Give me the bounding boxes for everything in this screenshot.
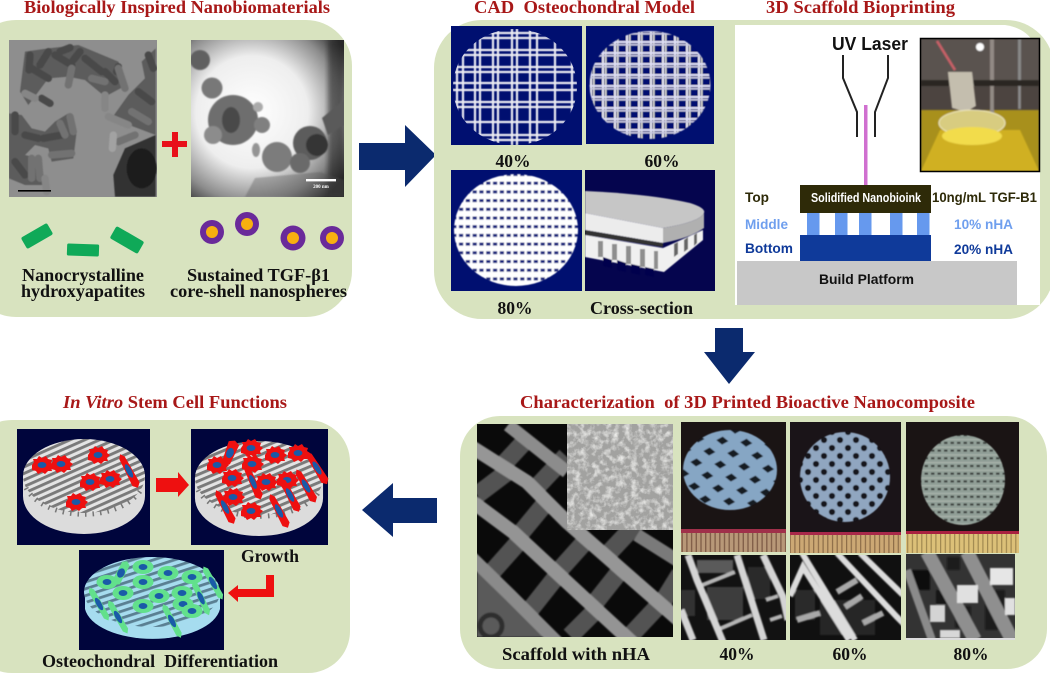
arrow: right bbox=[359, 125, 436, 187]
photo: 3D printed 60 percent scaffold bbox=[790, 422, 901, 553]
arrow: left bbox=[362, 483, 437, 537]
layer labels, left: Middle bbox=[745, 216, 788, 232]
labels: CAD model porosities: Cross-section bbox=[590, 298, 693, 318]
top layer: solidified nanobioink: Solidified Nanobioink bbox=[811, 190, 922, 205]
build platform: Build Platform bbox=[819, 271, 914, 287]
bottom layer bbox=[800, 235, 931, 261]
title: in vitro stem cell functions: In Vitro Stem Cell Functions bbox=[62, 392, 287, 412]
label: scaffold with nHA: Scaffold with nHA bbox=[502, 644, 650, 664]
layer labels, left: Bottom bbox=[745, 240, 793, 256]
top layer: solidified nanobioink bbox=[800, 185, 931, 213]
layer labels, right: 10% nHA bbox=[954, 216, 1013, 232]
layer labels, right: 20% nHA bbox=[954, 241, 1013, 257]
photo: printer bbox=[921, 39, 1039, 172]
labels: printed scaffold porosities: 40% bbox=[720, 644, 754, 664]
labels: CAD model porosities: 80% bbox=[498, 298, 532, 318]
disc image: initial cell seeding bbox=[17, 429, 150, 545]
labels: printed scaffold porosities bbox=[720, 644, 988, 664]
label: sustained TGF-beta1 nanospheres: Sustained TGF-β1 bbox=[187, 265, 330, 285]
layer labels, right bbox=[932, 189, 1037, 257]
label: osteochondral differentiation: Osteochondral Differentiation bbox=[42, 651, 278, 671]
label: nanocrystalline hydroxyapatites: hydroxyapatites bbox=[21, 281, 145, 301]
panel: biologically inspired nanobiomaterials bbox=[0, 20, 352, 317]
icon: hydroxyapatite rods bbox=[21, 223, 144, 257]
arrow: red elbow bbox=[228, 575, 274, 602]
labels: printed scaffold porosities: 80% bbox=[954, 644, 988, 664]
photo: 3D printed 80 percent scaffold bbox=[906, 422, 1019, 553]
build platform bbox=[737, 261, 1017, 305]
SEM: 60 percent bbox=[790, 553, 905, 640]
laser beam bbox=[864, 105, 868, 185]
CAD model 60 percent bbox=[586, 26, 714, 144]
CAD cross-section bbox=[585, 170, 715, 291]
labels: printed scaffold porosities: 60% bbox=[832, 644, 868, 664]
layer labels, right: 10ng/mL TGF-B1 bbox=[932, 189, 1037, 205]
SEM: 40 percent bbox=[681, 555, 788, 642]
arrow: down bbox=[704, 328, 755, 384]
CAD model 80 percent bbox=[451, 170, 582, 291]
panel: in vitro stem cell functions bbox=[0, 420, 350, 673]
label: growth: Growth bbox=[241, 546, 299, 566]
labels: CAD model porosities: 40% bbox=[496, 151, 530, 171]
inset: surface micrograph bbox=[567, 424, 673, 530]
bioprinting schematic bbox=[735, 25, 1040, 305]
TEM image: core-shell nanospheres: 200 nm bbox=[313, 185, 330, 190]
SEM: 80 percent bbox=[906, 552, 1015, 640]
middle layer columns bbox=[807, 213, 930, 235]
label: UV laser: UV Laser bbox=[832, 34, 908, 54]
label: nanocrystalline hydroxyapatites: Nanocrystalline bbox=[22, 265, 144, 285]
disc image: osteochondral differentiation bbox=[79, 550, 225, 650]
photo: 3D printed 40 percent scaffold bbox=[681, 422, 786, 552]
layer labels, left bbox=[745, 189, 793, 256]
icon: core-shell nanospheres bbox=[200, 212, 344, 250]
panel: CAD model and bioprinting bbox=[434, 20, 1050, 319]
SEM image: scaffold with nHA bbox=[477, 424, 673, 637]
icon: red plus sign bbox=[162, 132, 187, 157]
panel: characterization bbox=[460, 416, 1047, 669]
arrow: red right bbox=[156, 472, 189, 497]
icon: laser nozzle bbox=[843, 55, 888, 137]
TEM image: core-shell nanospheres bbox=[190, 40, 344, 197]
label: sustained TGF-beta1 nanospheres: core-shell nanospheres bbox=[170, 281, 347, 301]
title: characterization: Characterization of 3D Printed Bioactive Nanocomposite bbox=[520, 392, 975, 412]
TEM image: nanocrystalline hydroxyapatite rods bbox=[9, 40, 157, 197]
label: nanocrystalline hydroxyapatites bbox=[21, 265, 145, 301]
disc image: cell growth bbox=[191, 429, 330, 545]
CAD model 40 percent bbox=[450, 20, 582, 150]
label: sustained TGF-beta1 nanospheres bbox=[170, 265, 347, 301]
labels: CAD model porosities: 60% bbox=[644, 151, 680, 171]
layer labels, left: Top bbox=[745, 189, 769, 205]
labels: CAD model porosities bbox=[496, 151, 693, 318]
